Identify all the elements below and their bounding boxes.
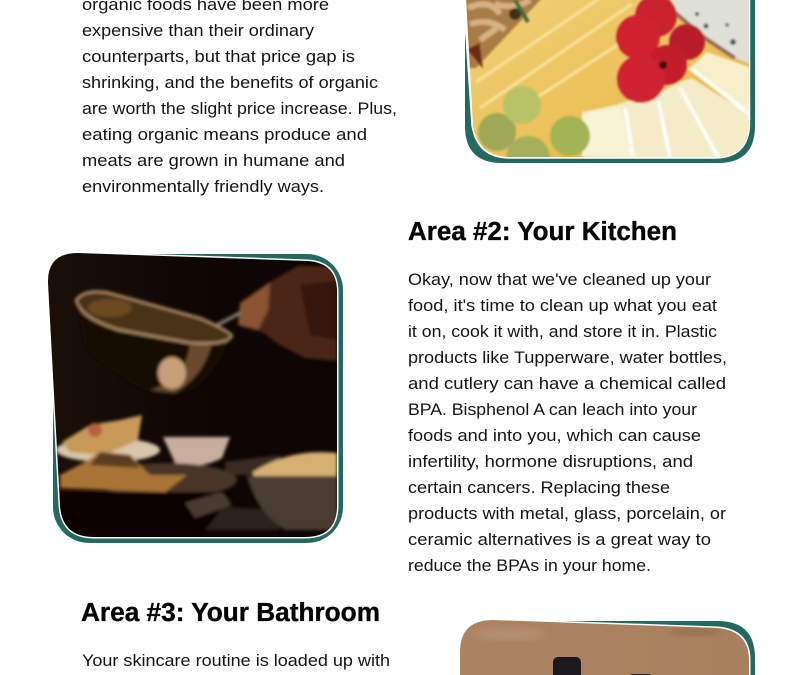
raspberries [635,0,677,37]
text block: kitchen: and cutlery can have a chemical called [408,374,726,393]
hand [238,266,337,361]
small white bowl [163,437,230,466]
text block: organic foods: are worth the slight price increase. Plus, [82,99,397,118]
blue cheese [670,0,755,66]
text block: kitchen: products like Tupperware, water bottles, [408,348,727,367]
photo frame: cheese board [465,0,755,163]
text block: kitchen: ceramic alternatives is a great way to [408,530,711,549]
board grain [475,0,633,110]
nuts [460,0,545,68]
text block: organic foods: environmentally friendly ways. [82,177,324,196]
bowl inside [76,292,232,343]
cream slices [582,78,755,160]
brie wedge [690,52,752,116]
table [204,506,281,532]
salad plate [56,438,160,462]
text block: organic foods [82,0,397,196]
text block: organic foods: meats are grown in humane and [82,151,345,170]
white inner outline [48,253,337,537]
text block: organic foods: expensive than their ordinary [82,21,315,40]
text block: kitchen: it on, cook it with, and store it in. Plastic [408,322,718,341]
text block: kitchen: reduce the BPAs in your home. [408,556,651,575]
second bottle cap [630,674,651,675]
text block: kitchen: BPA. Bisphenol A can leach into your [408,400,697,419]
text block: kitchen: food, it's time to clean up what you eat [408,296,717,315]
heading: Area #2: Area #2: Your Kitchen [408,218,677,246]
bathroom photo [460,620,749,675]
text block: bathroom: Your skincare routine is loaded up with [82,651,390,670]
text block: kitchen: foods and into you, which can cause [408,426,701,445]
food in right bowl [253,452,337,476]
grapes [478,113,516,151]
text block: kitchen: products with metal, glass, porcelain, or [408,504,726,523]
text block: kitchen: certain cancers. Replacing these [408,478,670,497]
white inner outline [463,0,750,158]
text block: kitchen: Okay, now that we've cleaned up your [408,270,711,289]
text block: organic foods: shrinking, and the benefits of organic [82,73,379,92]
teal frame [560,621,755,675]
kitchen photo [48,253,337,537]
text block: organic foods: counterparts, but that price gap is [82,47,355,66]
text block: organic foods: eating organic means produce and [82,125,367,144]
heading: Area #3: Area #3: Your Bathroom [81,599,380,627]
photo frame: kitchen [40,245,345,545]
right bowl [247,476,337,530]
photo frame: bathroom [455,615,755,675]
white inner outline [460,620,749,675]
text block: kitchen [408,270,727,575]
teal frame [465,0,755,163]
bowl body [78,305,232,395]
bottle cap [553,657,581,675]
spoon [215,310,242,328]
cheese board photo [466,0,749,157]
napkin [185,492,232,518]
food on plate [60,452,187,492]
teal frame [53,254,343,543]
text block: kitchen: infertility, hormone disruptions, and [408,452,693,471]
dark plate [93,463,237,497]
